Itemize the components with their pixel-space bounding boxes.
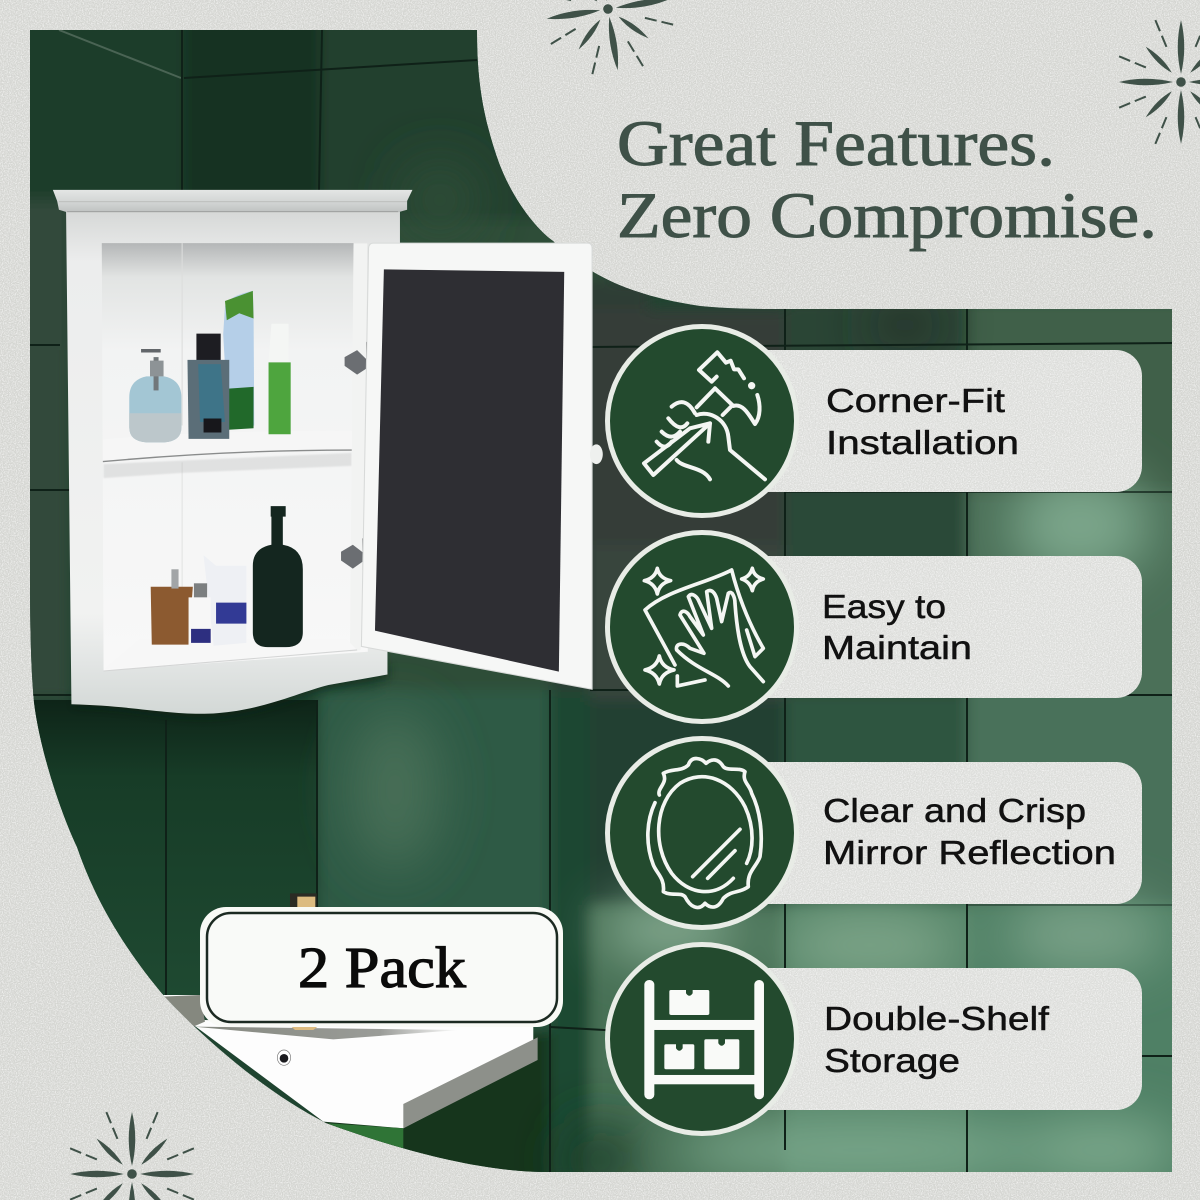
label text: Maintain <box>822 629 972 666</box>
feature 4: Double-Shelf Storage <box>608 944 1142 1134</box>
cabinet body <box>66 212 400 714</box>
products: lower shelf <box>151 506 303 650</box>
label text: Mirror Reflection <box>823 834 1116 871</box>
badge: 2 Pack <box>200 907 563 1027</box>
sink countertop <box>160 893 538 1151</box>
lower shelf <box>104 639 357 669</box>
label text <box>826 382 1019 461</box>
icon: hand holding hammer <box>644 352 765 479</box>
door knob <box>590 444 603 464</box>
label text: Double-Shelf <box>824 1000 1050 1037</box>
cabinet shadow <box>75 664 389 717</box>
open door frame <box>361 243 592 689</box>
door hinges <box>341 341 378 571</box>
label text: Storage <box>824 1042 960 1079</box>
cabinet crown moulding <box>53 190 412 212</box>
label text <box>824 1000 1050 1079</box>
badge: 2 Pack: 2 Pack <box>298 935 466 1000</box>
label text: Easy to <box>822 588 946 625</box>
icon: ornate mirror <box>648 759 761 908</box>
decorative starburst: bottom left <box>70 1112 194 1200</box>
door mirror panel <box>375 269 564 672</box>
corner cabinet with open mirrored door <box>53 190 603 717</box>
products: upper shelf <box>129 291 291 442</box>
decorative starburst: top centre <box>537 0 679 80</box>
heading: Great Features. <box>617 108 1055 180</box>
label text: Installation <box>826 424 1019 461</box>
cabinet interior niche <box>102 243 368 671</box>
feature 2: Easy to Maintain <box>608 532 1142 722</box>
sink tap hole <box>277 1050 291 1065</box>
label text <box>823 792 1116 871</box>
heading <box>617 108 1157 252</box>
decorative starburst: top right <box>1119 20 1200 144</box>
upper shelf <box>103 431 352 462</box>
feature 1: Corner-Fit Installation <box>608 326 1142 516</box>
icon: hand wiping with cloth <box>644 568 763 686</box>
heading: Zero Compromise. <box>617 180 1157 252</box>
label text <box>822 588 972 666</box>
label text: Corner-Fit <box>826 382 1005 419</box>
label text: Clear and Crisp <box>823 792 1086 829</box>
icon: shelf with boxes <box>644 980 764 1099</box>
feature 3: Clear and Crisp Mirror Reflection <box>608 738 1142 928</box>
